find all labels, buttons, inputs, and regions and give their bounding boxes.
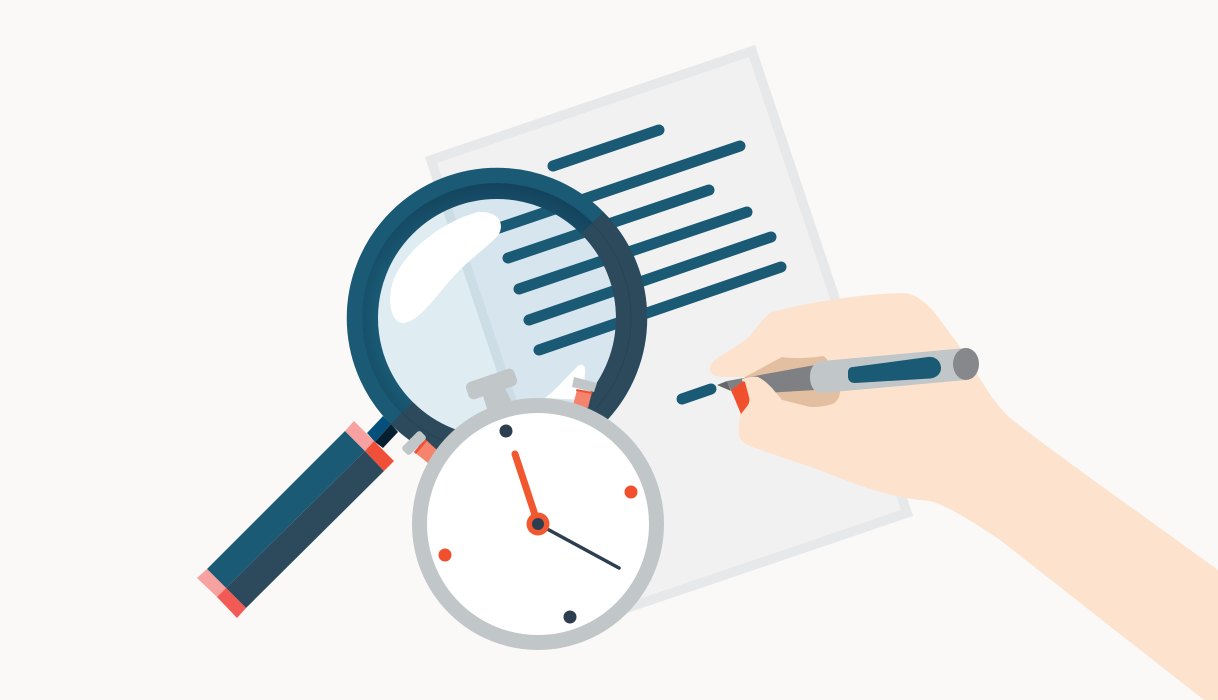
magnifying glass: [197, 176, 640, 618]
paper document: [425, 45, 913, 628]
left pusher: [401, 430, 437, 463]
palm shadow: [745, 356, 840, 407]
illustration: document review under time pressure: [197, 45, 1218, 700]
hand holding pen: [710, 293, 1218, 700]
pen barrel: [810, 348, 966, 393]
stopwatch: [401, 367, 656, 642]
hour hand: [515, 454, 538, 524]
magnifier handle: [197, 421, 394, 618]
minute hand: [538, 524, 619, 568]
pen end cap: [953, 348, 979, 380]
hour markers: [438, 424, 638, 624]
pen body: [727, 365, 815, 395]
lower lens highlight: [545, 365, 585, 400]
pen: [717, 348, 979, 395]
stopwatch crown: [464, 367, 519, 412]
watch face: [420, 406, 656, 642]
hand and arm: [710, 293, 1218, 700]
magnifier rim: [354, 176, 640, 460]
magnifier neck: [367, 416, 398, 448]
right pusher: [572, 377, 597, 408]
thumb: [739, 377, 820, 460]
center pin: [526, 512, 550, 536]
magnifier lens glass: [378, 199, 616, 437]
lens highlight: [390, 212, 501, 323]
text lines on paper: [490, 130, 781, 399]
pen grip label: [848, 357, 941, 383]
fingernail: [731, 381, 749, 414]
pen nib: [717, 381, 731, 391]
